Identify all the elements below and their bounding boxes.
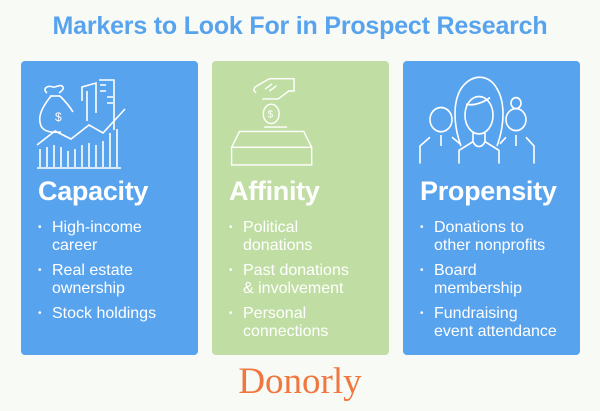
- icon: group of people: [419, 76, 535, 164]
- bullet list: Real estate: [52, 262, 133, 279]
- heading: Affinity: [229, 176, 320, 206]
- bullet list: membership: [434, 280, 522, 297]
- bullet list: event attendance: [434, 323, 557, 340]
- bullet list: ownership: [52, 280, 125, 297]
- logo: Donorly: [238, 361, 362, 402]
- bullet list: [420, 219, 557, 340]
- bullet list: other nonprofits: [434, 237, 545, 254]
- bullet list: [38, 219, 156, 322]
- bullet list: Past donations: [243, 262, 349, 279]
- heading: Propensity: [420, 176, 557, 206]
- bullet list: & involvement: [243, 280, 344, 297]
- icon: hand dropping coin into box: [230, 78, 312, 166]
- bullet list: Stock holdings: [52, 305, 156, 322]
- panel: capacity: [21, 61, 198, 355]
- icon: hand dropping coin into box: $: [268, 109, 274, 120]
- bullet list: Fundraising: [434, 305, 518, 322]
- panel: affinity: [212, 61, 389, 355]
- bullet list: donations: [243, 237, 312, 254]
- bullet list: Donations to: [434, 219, 524, 236]
- bullet list: High-income: [52, 219, 142, 236]
- title: Markers to Look For in Prospect Research: [53, 12, 547, 40]
- bullet list: [229, 219, 349, 340]
- bullet list: Political: [243, 219, 298, 236]
- bullet list: career: [52, 237, 97, 254]
- icon: money bag and buildings: $: [55, 110, 62, 124]
- icon: money bag and buildings: [36, 79, 126, 169]
- bullet list: Board: [434, 262, 477, 279]
- bullet list: connections: [243, 323, 328, 340]
- bullet list: Personal: [243, 305, 306, 322]
- heading: Capacity: [38, 176, 148, 206]
- panel: propensity: [403, 61, 580, 355]
